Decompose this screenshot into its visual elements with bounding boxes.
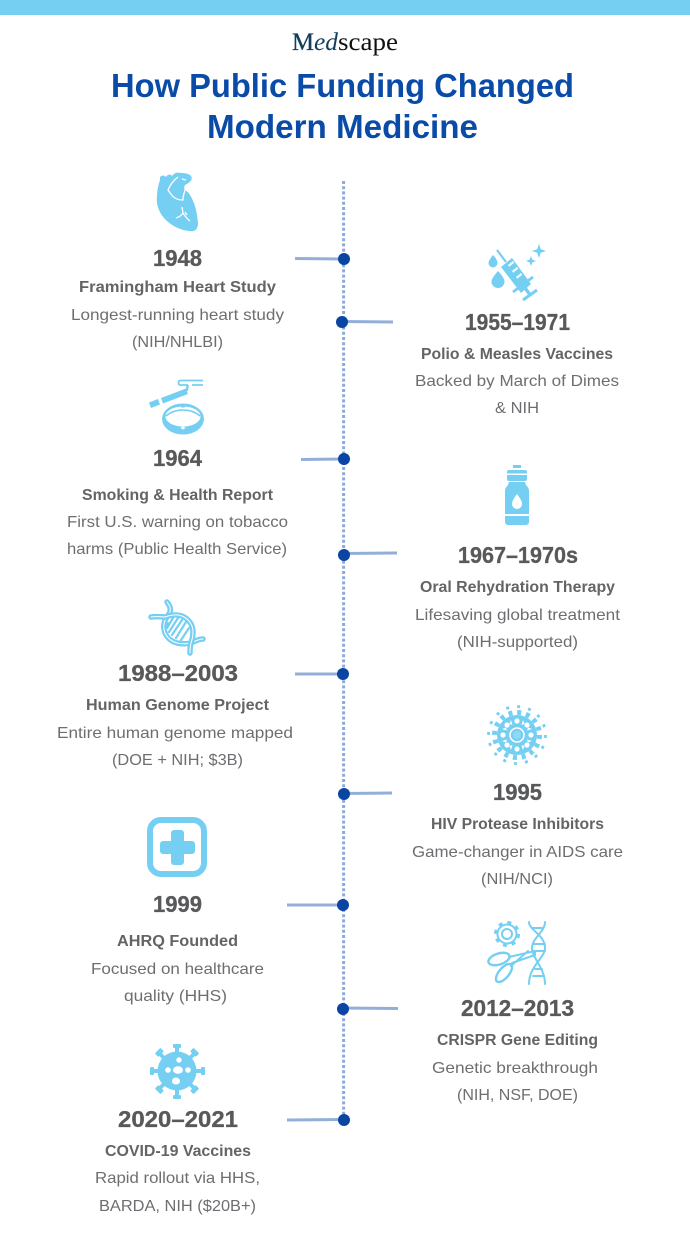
title <box>111 67 574 145</box>
icon: coronavirus <box>150 1044 205 1099</box>
timeline spine <box>342 181 345 1125</box>
event: 1999 AHRQ Founded: Focused on healthcare <box>91 961 264 978</box>
event: 2020–2021 COVID-19 Vaccines: BARDA, NIH ($20B+) <box>99 1198 256 1215</box>
event: 1955–1971 Polio & Measles Vaccines: 1955–1971 <box>465 309 570 335</box>
event: 2020–2021 COVID-19 Vaccines: Rapid rollout via HHS, <box>95 1170 260 1187</box>
event: 1948 Framingham Heart Study: (NIH/NHLBI) <box>132 334 223 351</box>
Medscape logo: M <box>292 29 314 56</box>
event: 1995 HIV Protease Inhibitors: (NIH/NCI) <box>481 871 553 888</box>
icon: CRISPR gear, scissors and DNA <box>487 922 545 985</box>
icon: rehydration bottle <box>505 465 529 525</box>
event: 1967–1970s Oral Rehydration Therapy: (NIH-supported) <box>457 634 578 651</box>
event: 1988–2003 Human Genome Project: 1988–2003 <box>118 660 238 686</box>
event: 1999 AHRQ Founded: 1999 <box>153 891 202 917</box>
event: 1948 Framingham Heart Study: 1948 <box>153 245 202 271</box>
event: 1967–1970s Oral Rehydration Therapy: Lifesaving global treatment <box>415 607 621 624</box>
Medscape logo <box>292 29 398 56</box>
event: 1967–1970s Oral Rehydration Therapy: Oral Rehydration Therapy <box>420 579 615 596</box>
event: 1948 Framingham Heart Study <box>71 245 284 351</box>
event: 1964 Smoking & Health Report: harms (Public Health Service) <box>67 541 287 558</box>
event: 2012–2013 CRISPR Gene Editing: (NIH, NSF, DOE) <box>457 1087 578 1104</box>
event: 1995 HIV Protease Inhibitors: Game-changer in AIDS care <box>412 844 623 861</box>
icon: HIV virus <box>488 706 546 764</box>
icon: medical cross <box>150 820 204 874</box>
event: 1967–1970s Oral Rehydration Therapy: 1967–1970s <box>458 542 578 568</box>
event: 1964 Smoking & Health Report: First U.S. warning on tobacco <box>67 514 288 531</box>
event: 1964 Smoking & Health Report: 1964 <box>153 445 202 471</box>
icon: ashtray and cigarette <box>149 380 204 434</box>
Medscape logo: scape <box>338 29 398 56</box>
title: How Public Funding Changed <box>111 67 574 104</box>
event: 1955–1971 Polio & Measles Vaccines: Polio & Measles Vaccines <box>421 346 613 363</box>
event: 1999 AHRQ Founded: AHRQ Founded <box>117 933 238 950</box>
event: 2020–2021 COVID-19 Vaccines <box>95 1106 260 1215</box>
icon: syringe <box>488 244 546 300</box>
event: 1988–2003 Human Genome Project: (DOE + NIH; $3B) <box>112 752 243 769</box>
event: 2020–2021 COVID-19 Vaccines: 2020–2021 <box>118 1106 238 1132</box>
event: 1955–1971 Polio & Measles Vaccines: Backed by March of Dimes <box>415 373 619 390</box>
title: Modern Medicine <box>207 108 478 145</box>
event: 1988–2003 Human Genome Project: Human Genome Project <box>86 697 270 714</box>
event: 2012–2013 CRISPR Gene Editing: CRISPR Gene Editing <box>437 1032 598 1049</box>
event: 1995 HIV Protease Inhibitors: HIV Protease Inhibitors <box>431 816 604 833</box>
event: 1955–1971 Polio & Measles Vaccines <box>415 309 619 417</box>
timeline connectors and markers <box>287 253 398 1126</box>
event: 1955–1971 Polio & Measles Vaccines: & NIH <box>495 400 539 417</box>
event: 1967–1970s Oral Rehydration Therapy <box>415 542 621 651</box>
event: 1988–2003 Human Genome Project <box>57 660 293 769</box>
event: 1948 Framingham Heart Study: Longest-running heart study <box>71 307 284 324</box>
event: 1988–2003 Human Genome Project: Entire human genome mapped <box>57 725 293 742</box>
icon: DNA helix <box>151 602 203 653</box>
event: 1995 HIV Protease Inhibitors <box>412 779 623 888</box>
icon: heart <box>157 173 198 231</box>
top banner <box>0 0 690 15</box>
event: 2020–2021 COVID-19 Vaccines: COVID-19 Vaccines <box>105 1143 251 1160</box>
Medscape logo: ed <box>314 29 338 56</box>
event: 1964 Smoking & Health Report <box>67 445 288 558</box>
event: 2012–2013 CRISPR Gene Editing <box>432 995 598 1104</box>
event: 1999 AHRQ Founded: quality (HHS) <box>124 988 227 1005</box>
event: 1999 AHRQ Founded <box>91 891 264 1005</box>
event: 1995 HIV Protease Inhibitors: 1995 <box>493 779 542 805</box>
event: 2012–2013 CRISPR Gene Editing: 2012–2013 <box>461 995 574 1021</box>
event: 1964 Smoking & Health Report: Smoking & Health Report <box>82 487 274 504</box>
event: 1948 Framingham Heart Study: Framingham Heart Study <box>79 279 276 296</box>
event: 2012–2013 CRISPR Gene Editing: Genetic breakthrough <box>432 1060 598 1077</box>
